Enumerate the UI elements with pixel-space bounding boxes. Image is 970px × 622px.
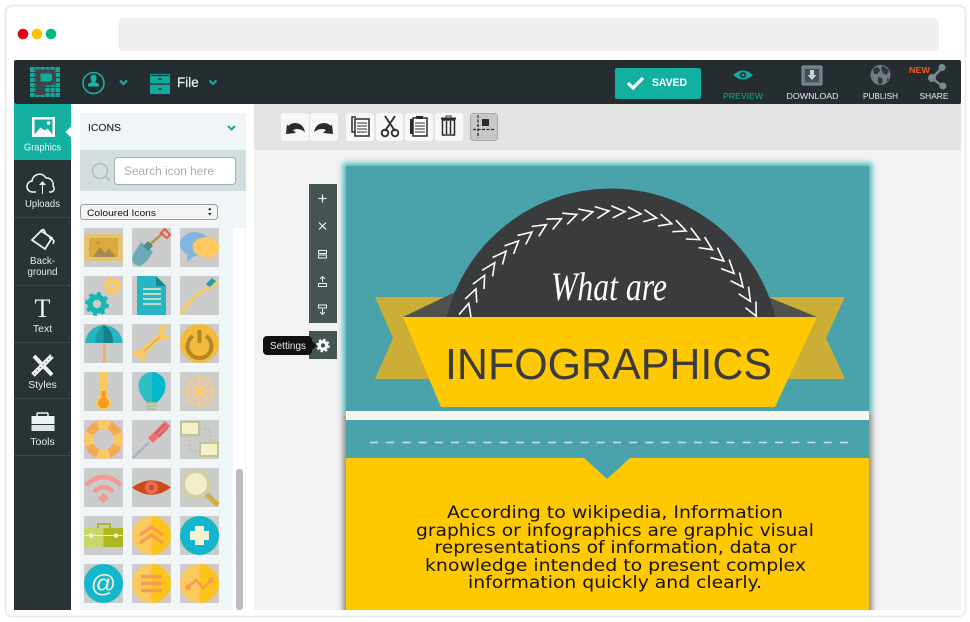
sidebar item: text: Text — [33, 323, 52, 335]
panel heading — [88, 123, 235, 134]
preview action: PREVIEW — [723, 91, 764, 101]
settings tooltip: Settings — [270, 341, 306, 352]
button: undo — [281, 113, 309, 141]
ribbon tail: right — [750, 297, 845, 379]
address bar — [118, 18, 939, 51]
button: delete — [435, 113, 463, 141]
publish action: PUBLISH — [863, 91, 898, 101]
dome — [446, 188, 776, 317]
icon: file cabinet — [150, 74, 170, 94]
sidebar item: background — [28, 230, 58, 278]
ribbon front — [403, 317, 817, 407]
button: paste — [405, 113, 433, 141]
icon tile: light bulb — [132, 372, 171, 411]
description panel — [346, 458, 869, 610]
tool: stack — [318, 250, 326, 258]
button: cut — [376, 113, 403, 141]
saved button — [615, 68, 701, 99]
sidebar item: background: Back- — [30, 255, 55, 267]
sidebar item: uploads — [25, 174, 60, 210]
teal band with stitching — [346, 420, 869, 458]
button: copy — [346, 113, 374, 141]
icon tile: menu lines — [132, 564, 171, 603]
publish action — [863, 65, 898, 101]
button: redo — [310, 113, 338, 141]
icon tile: magnifier — [180, 468, 219, 507]
search bar: Search icon here — [124, 166, 214, 178]
panel heading: ICONS — [88, 123, 121, 134]
description text: According to wikipedia, Information — [447, 503, 783, 523]
icon tile: chevrons up — [132, 516, 171, 555]
download action — [786, 66, 838, 101]
icon tile: toothbrush — [180, 276, 219, 315]
icon tile: at sign — [84, 564, 123, 603]
icon tile: line chart — [180, 564, 219, 603]
dropdown: coloured icons: Coloured Icons — [87, 208, 156, 219]
download action: DOWNLOAD — [786, 91, 838, 101]
tool: move down — [318, 305, 326, 314]
icon tile: power button — [180, 324, 219, 363]
sidebar item: text — [33, 294, 52, 335]
icon tile: screwdriver — [132, 420, 171, 459]
sidebar item: graphics: Graphics — [24, 142, 61, 154]
icon tile: plus — [180, 516, 219, 555]
icon tile: at sign: @ — [91, 570, 116, 598]
arrow arc — [459, 206, 761, 319]
left sidebar — [14, 104, 71, 610]
icon: file chevron — [210, 80, 216, 84]
scrollbar — [233, 228, 245, 610]
icon tile: speech bubbles — [180, 228, 220, 267]
notch pointer — [584, 458, 630, 479]
description text: knowledge intended to present complex — [425, 556, 806, 576]
saved button: SAVED — [652, 77, 687, 89]
main heading: INFOGRAPHICS — [445, 340, 772, 389]
canvas toolbar — [254, 104, 961, 150]
settings tooltip — [263, 336, 317, 355]
icon: user account — [83, 72, 104, 94]
icon grid — [84, 228, 220, 603]
top navigation bar — [14, 60, 961, 104]
icon tile: life ring — [84, 420, 123, 459]
sidebar item: background: ground — [28, 266, 58, 278]
share action — [909, 64, 949, 101]
sidebar item: styles — [28, 356, 57, 391]
description text: representations of information, data or — [434, 538, 796, 558]
icon tile: ship wheel — [180, 372, 219, 411]
tool: remove — [319, 222, 326, 230]
sidebar item: tools — [30, 413, 55, 448]
dropdown: coloured icons — [80, 204, 218, 220]
icon tile: thermometer — [84, 372, 123, 411]
preview action — [723, 70, 764, 101]
button: grid toggle — [470, 114, 498, 140]
description text: information quickly and clearly. — [468, 573, 762, 593]
icon tile: umbrella — [84, 324, 123, 363]
window control dots — [18, 29, 56, 39]
infographic header — [346, 166, 869, 411]
sidebar item: tools: Tools — [30, 436, 55, 448]
share action: NEW — [909, 65, 931, 75]
icon tile: wrench — [132, 324, 171, 363]
icon tile: stamp picture — [84, 228, 123, 267]
tool: add — [318, 194, 326, 202]
icon tile: toolbox — [84, 516, 123, 555]
sidebar item: styles: Styles — [28, 379, 57, 391]
handwritten heading: What are — [551, 264, 667, 309]
sidebar item: uploads: Uploads — [25, 198, 60, 210]
description text: graphics or infographics are graphic visual — [416, 521, 814, 541]
icon tile: flow diagram — [180, 420, 219, 459]
canvas workspace background — [254, 104, 961, 610]
logo — [30, 67, 60, 97]
icon tile: document — [132, 276, 171, 315]
vertical editing tools — [309, 184, 337, 323]
share action: SHARE — [920, 91, 949, 101]
search bar — [80, 150, 246, 191]
icon panel — [80, 113, 246, 610]
sidebar item: graphics — [14, 104, 71, 160]
description text — [416, 503, 814, 593]
tool: move up — [318, 276, 326, 286]
icon tile: eye — [132, 468, 171, 507]
ribbon tail: left — [375, 297, 470, 379]
settings button — [309, 331, 337, 359]
infographic shadows — [343, 163, 872, 622]
file menu label: File — [177, 75, 199, 90]
icon tile: shovel — [132, 228, 171, 267]
ribbon fold shadows — [403, 292, 817, 317]
icon tile: wifi — [84, 468, 123, 507]
sidebar item: text: T — [35, 294, 51, 323]
icon: user chevron — [120, 80, 127, 84]
icon tile: gears — [84, 276, 123, 315]
divider strip — [346, 411, 869, 420]
